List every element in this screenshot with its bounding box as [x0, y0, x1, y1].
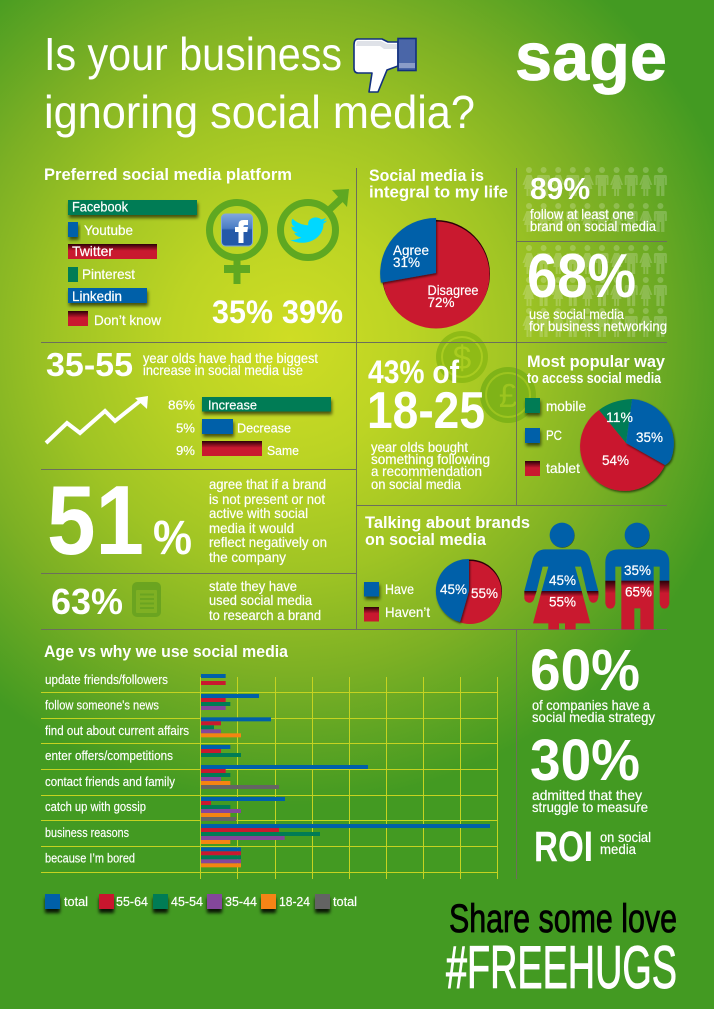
description: measure: admitted that they	[532, 787, 642, 803]
description: state they have	[209, 578, 297, 594]
icon: rising arrow	[46, 396, 148, 443]
panel: 35-55 year olds	[46, 346, 331, 458]
figure percentages: 35%	[624, 562, 651, 578]
bar chart: change in use: Decrease	[237, 420, 291, 436]
legend: Have	[385, 581, 414, 597]
pie chart: Disagree	[428, 282, 479, 298]
legend: total	[333, 894, 357, 909]
stat: 68%	[527, 242, 636, 311]
figure percentages: 45%	[549, 572, 576, 588]
panel: preferred social media platform	[44, 165, 349, 330]
heading: Social media is	[369, 166, 484, 185]
legend: 55-64	[116, 894, 148, 909]
chart labels	[45, 673, 189, 866]
icon: thumbs down	[354, 38, 416, 92]
title: Is your business	[44, 28, 342, 80]
legend	[45, 894, 357, 909]
bar chart: change in use: 5%	[176, 420, 195, 436]
heading: Preferred social media platform	[44, 165, 292, 184]
bar chart: change in use: 86%	[168, 398, 195, 412]
stat: female and male percentages: 39%	[282, 294, 343, 330]
bar chart: platforms: Facebook	[72, 198, 129, 214]
panel: company strategy stats	[530, 638, 655, 871]
description: measure: struggle to measure	[532, 799, 648, 815]
description: to research a brand	[209, 607, 321, 623]
heading: integral to my life	[369, 182, 508, 202]
bar chart: platforms: Twitter	[72, 243, 113, 259]
description: the company	[209, 549, 286, 565]
icon: currency coins: $	[453, 339, 471, 376]
bar chart: change in use	[168, 397, 331, 458]
chart labels: update friends/followers	[45, 673, 168, 687]
description: ROI: media	[600, 841, 636, 857]
heading: Most popular way	[527, 352, 666, 371]
pie chart: 45%	[440, 581, 467, 597]
pie chart: 11%	[606, 409, 633, 425]
icon: woman figure	[524, 523, 598, 629]
heading: Age vs why we use social media	[44, 642, 288, 661]
stat: %	[153, 512, 192, 565]
description: follow at least one	[530, 206, 634, 222]
stat: 89%	[530, 171, 590, 206]
description: is not present or not	[209, 491, 325, 507]
stat	[367, 354, 485, 440]
title	[44, 28, 475, 138]
heading: Talking about brands	[365, 513, 530, 532]
description: something following	[371, 451, 490, 467]
bar chart: change in use: Increase	[208, 398, 257, 412]
pie chart: 55%	[471, 585, 498, 601]
panel: age vs why we use social media	[41, 642, 498, 909]
heading	[527, 352, 666, 387]
icon: female symbol with facebook	[210, 202, 264, 284]
bar chart: platforms: Youtube	[84, 222, 133, 238]
chart labels: business reasons	[45, 826, 129, 840]
description: strategy: social media strategy	[532, 709, 655, 725]
pie chart: 35%	[636, 429, 663, 445]
stat: 51	[47, 465, 144, 575]
panel: 68 percent business networking	[522, 242, 667, 337]
description: media it would	[209, 520, 294, 536]
icon: currency coins: £	[499, 377, 517, 414]
description: ROI: on social	[600, 829, 651, 845]
description: active with social	[209, 505, 308, 521]
legend: 35-44	[225, 894, 257, 909]
pie chart: Agree	[393, 242, 429, 258]
description: used social media	[209, 592, 312, 608]
panel: talking about brands	[364, 513, 669, 629]
bar chart: change in use: Same	[267, 443, 299, 458]
icon: clipboard	[132, 582, 161, 617]
stat: 43% of	[368, 354, 459, 390]
legend: Haven’t	[385, 604, 430, 620]
logo: sage: sage	[515, 19, 667, 95]
figure percentages	[549, 562, 652, 610]
panel: 43 percent of 18-25	[367, 354, 490, 492]
pie chart	[580, 399, 674, 491]
chart labels: find out about current affairs	[45, 724, 189, 738]
description: use social media	[529, 306, 624, 322]
legend	[525, 398, 586, 476]
bar chart: platforms: Linkedin	[72, 288, 122, 304]
bar chart: platforms	[68, 198, 197, 328]
legend: total	[64, 894, 88, 909]
chart labels: enter offers/competitions	[45, 749, 173, 763]
icon: people rows	[522, 245, 667, 337]
panel: 89 percent follow a brand	[522, 167, 667, 234]
chart labels: because I’m bored	[45, 852, 135, 866]
legend: 18-24	[279, 894, 310, 909]
legend: PC	[546, 427, 562, 443]
chart labels: contact friends and family	[45, 775, 176, 789]
figure percentages: 55%	[549, 594, 576, 610]
icon: male symbol with twitter	[280, 189, 349, 258]
description: increase in social media use	[143, 362, 303, 378]
description: on social media	[371, 476, 461, 492]
title: ignoring social media?	[44, 86, 475, 138]
bar chart: change in use: 9%	[176, 443, 195, 458]
stat: female and male percentages	[212, 294, 343, 330]
legend: 45-54	[171, 894, 203, 909]
stat: ROI: ROI	[534, 823, 593, 871]
chart labels: catch up with gossip	[45, 800, 146, 814]
legend: mobile	[546, 398, 586, 414]
description: a recommendation	[371, 463, 482, 479]
pie chart: 54%	[602, 452, 629, 468]
stat: 60 percent: 60%	[530, 638, 640, 703]
description: brand on social media	[530, 218, 656, 234]
heading: on social media	[365, 530, 487, 549]
stat: female and male percentages: 35%	[212, 294, 273, 330]
figure percentages: 65%	[625, 584, 652, 600]
bar chart: platforms: Pinterest	[82, 266, 135, 282]
description: strategy: of companies have a	[532, 697, 650, 713]
panel: integral to my life	[369, 166, 508, 328]
bar chart: platforms: Don’t know	[94, 312, 162, 328]
pie chart	[436, 559, 502, 624]
panel: 51 percent	[47, 465, 327, 575]
pie chart	[380, 218, 490, 328]
stat: 35-55	[46, 346, 133, 383]
description: year olds have had the biggest	[143, 350, 318, 366]
icon: currency coins	[436, 331, 536, 423]
description: reflect negatively on	[209, 534, 327, 550]
description: agree that if a brand	[209, 476, 326, 492]
stat: 18-25	[367, 382, 485, 440]
legend: tablet	[546, 460, 580, 476]
icon: people rows	[522, 167, 667, 232]
description: for business networking	[529, 318, 667, 334]
pie chart: 72%	[428, 294, 454, 310]
icon: man figure	[605, 523, 669, 629]
panel: most popular way to access	[525, 352, 674, 491]
stat: 63%	[51, 581, 123, 622]
legend	[364, 581, 430, 622]
bar chart	[201, 674, 490, 867]
stat: 30 percent: 30%	[530, 728, 640, 793]
call to action: share some love	[446, 897, 677, 1001]
description: year olds bought	[371, 439, 468, 455]
heading: to access social media	[527, 371, 662, 387]
chart labels: follow someone's news	[45, 698, 159, 712]
pie chart: 31%	[393, 254, 420, 270]
panel: 63 percent	[51, 578, 321, 623]
